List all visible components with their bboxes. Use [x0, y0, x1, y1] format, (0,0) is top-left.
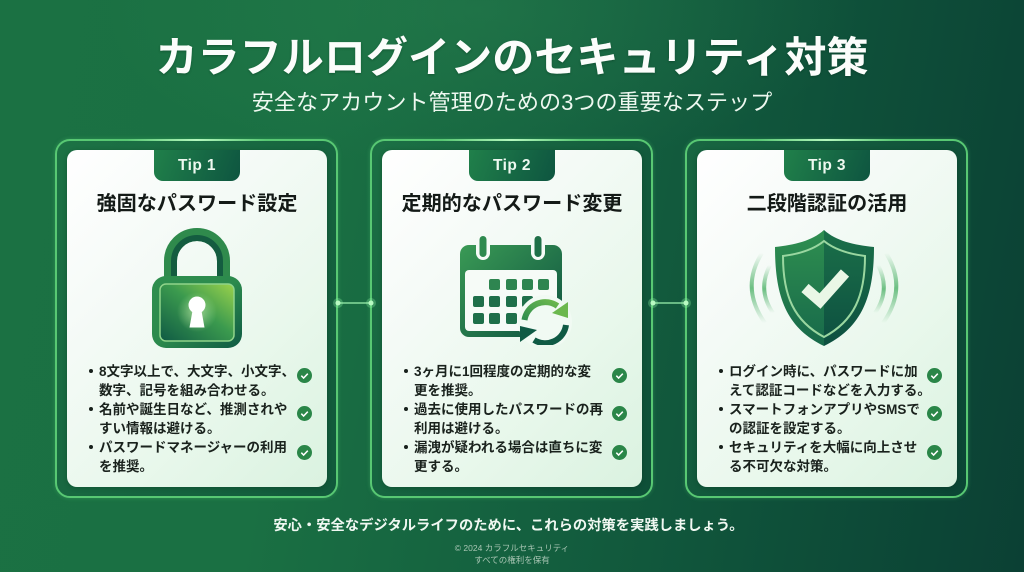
bullet 2: スマートフォンアプリやSMSで	[729, 402, 920, 417]
bullet 3: セキュリティを大幅に向上させ	[729, 440, 917, 455]
bullet 1: 更を推奨。	[414, 383, 482, 398]
bullet 1	[414, 362, 591, 400]
panel: tip 1	[55, 139, 338, 498]
bullet 3	[729, 438, 917, 476]
copyright: すべての権利を保有	[474, 554, 550, 564]
card: tip 2	[382, 150, 642, 487]
bullet 1	[99, 362, 295, 400]
bullet 1: 8文字以上で、大文字、小文字、	[99, 364, 295, 379]
connector: tip 1 to tip 2	[333, 298, 376, 308]
bullet 3: 更する。	[414, 459, 468, 474]
copyright: © 2024 カラフルセキュリティ	[455, 543, 569, 553]
bullet 2: 名前や誕生日など、推測されや	[99, 402, 287, 417]
bullet 3: る不可欠な対策。	[729, 459, 837, 474]
check 1	[927, 368, 942, 383]
bullet 2: 過去に使用したパスワードの再	[414, 402, 603, 417]
panel: tip 3	[685, 139, 968, 498]
check 2	[297, 406, 312, 421]
bullet 1: 数字、記号を組み合わせる。	[99, 383, 274, 398]
check 3	[297, 445, 312, 460]
bullet 2: の認証を設定する。	[729, 421, 850, 436]
tab: Tip 3: Tip 3	[808, 157, 846, 174]
checklist: tip 1	[89, 364, 312, 474]
tab: Tip 2: Tip 2	[493, 157, 531, 174]
tab: Tip 2	[469, 150, 555, 181]
footer message: 安心・安全なデジタルライフのために、これらの対策を実践しましょう。	[273, 518, 744, 534]
title: カラフルログインのセキュリティ対策	[155, 34, 869, 81]
panel: tip 2	[370, 139, 653, 498]
check 2	[927, 406, 942, 421]
checklist: tip 2	[404, 364, 627, 474]
bullet 1: えて認証コードなどを入力する。	[729, 383, 931, 398]
checklist: tip 3	[719, 364, 942, 474]
icon: calendar with refresh	[460, 236, 569, 345]
bullet 2: 利用は避ける。	[414, 421, 508, 436]
bullet 3	[99, 438, 287, 476]
check 3	[927, 445, 942, 460]
tab: Tip 3	[784, 150, 870, 181]
check 1	[297, 368, 312, 383]
bullet 3: を推奨。	[99, 459, 153, 474]
bullet 2	[729, 400, 920, 438]
bullet 1	[729, 362, 931, 400]
bullet 3	[414, 438, 602, 476]
check 2	[612, 406, 627, 421]
connector: tip 2 to tip 3	[648, 298, 691, 308]
tab: Tip 1	[154, 150, 240, 181]
check 3	[612, 445, 627, 460]
heading: tip 3: 二段階認証の活用	[747, 193, 907, 215]
bullet 2	[99, 400, 287, 438]
icon: padlock	[152, 228, 242, 348]
bullet 1: ログイン時に、パスワードに加	[729, 364, 918, 379]
tab: Tip 1: Tip 1	[178, 157, 216, 174]
bullet 2: すい情報は避ける。	[99, 421, 220, 436]
card: tip 1	[67, 150, 327, 487]
check 1	[612, 368, 627, 383]
bullet 3: 漏洩が疑われる場合は直ちに変	[414, 440, 602, 455]
copyright	[454, 543, 569, 564]
bullet 3: パスワードマネージャーの利用	[99, 440, 287, 455]
heading: tip 2: 定期的なパスワード変更	[401, 193, 623, 215]
card: tip 3	[697, 150, 957, 487]
heading: tip 1: 強固なパスワード設定	[97, 193, 297, 215]
icon: shield with check	[750, 230, 898, 346]
bullet 1: 3ヶ月に1回程度の定期的な変	[414, 364, 591, 379]
bullet 2	[414, 400, 603, 438]
subtitle: 安全なアカウント管理のための3つの重要なステップ	[252, 90, 772, 115]
